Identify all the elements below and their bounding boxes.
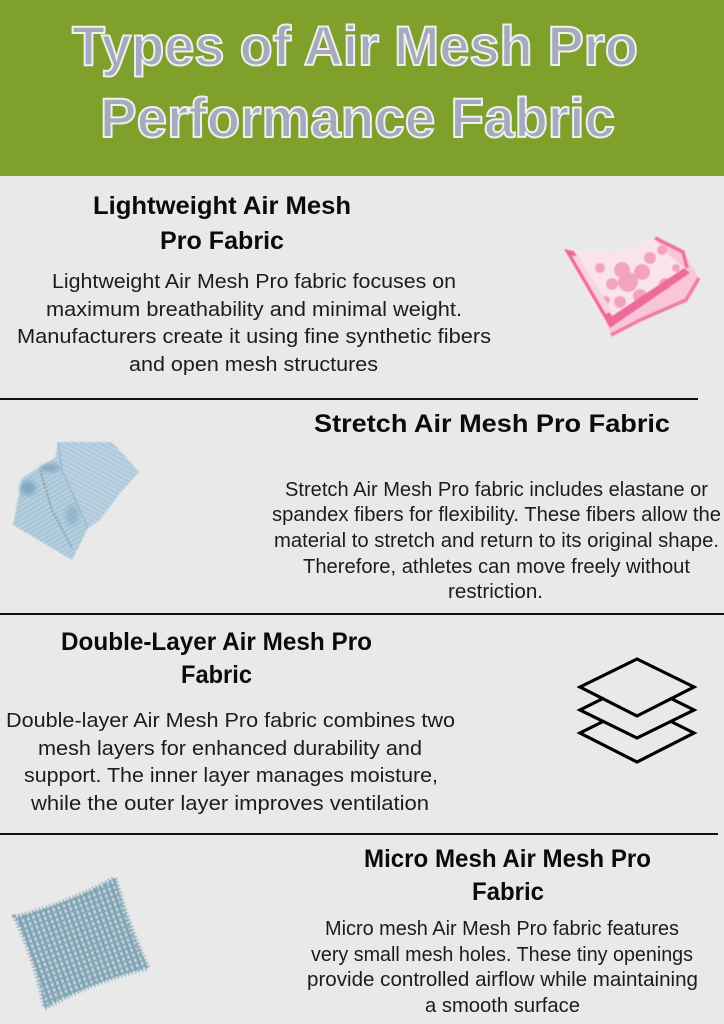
divider 1 bbox=[0, 398, 698, 400]
panel: double-layer fabric bbox=[6, 628, 694, 815]
panel: lightweight fabric bbox=[17, 192, 699, 376]
text: lightweight description: maximum breathability and minimal weight. bbox=[46, 299, 462, 321]
heading: stretch: Stretch Air Mesh Pro Fabric bbox=[314, 410, 670, 438]
text: double-layer description: Double-layer Air Mesh Pro fabric combines two bbox=[6, 710, 455, 732]
heading: micro mesh: Micro Mesh Air Mesh Pro bbox=[364, 845, 651, 873]
text: double-layer description: support. The inner layer manages moisture, bbox=[24, 765, 438, 787]
text: lightweight description: Lightweight Air Mesh Pro fabric focuses on bbox=[52, 271, 456, 293]
text: stretch description: Therefore, athletes can move freely without bbox=[303, 556, 690, 578]
title: Types of Air Mesh Pro bbox=[72, 14, 638, 77]
icon: stacked layers bbox=[580, 659, 694, 762]
text: stretch description: spandex fibers for flexibility. These fibers allow the bbox=[272, 504, 721, 526]
text: lightweight description bbox=[17, 271, 491, 376]
icon: pink patterned scarf bbox=[564, 237, 699, 337]
heading: lightweight: Lightweight Air Mesh bbox=[93, 192, 351, 220]
text: stretch description bbox=[272, 479, 721, 603]
text: stretch description: Stretch Air Mesh Pro fabric includes elastane or bbox=[285, 479, 708, 501]
title: Performance Fabric bbox=[100, 86, 615, 149]
text: double-layer description bbox=[6, 710, 455, 815]
heading: micro mesh: Fabric bbox=[472, 878, 544, 906]
heading: lightweight bbox=[93, 192, 351, 255]
header band bbox=[0, 0, 724, 176]
icon: woven mesh swatch bbox=[15, 878, 148, 1008]
divider 2 bbox=[0, 613, 724, 615]
text: micro mesh description: provide controlled airflow while maintaining bbox=[307, 969, 698, 991]
text: lightweight description: Manufacturers create it using fine synthetic fibers bbox=[17, 326, 491, 348]
heading: double-layer: Fabric bbox=[181, 661, 252, 689]
panel: stretch fabric bbox=[13, 410, 721, 603]
heading: double-layer: Double-Layer Air Mesh Pro bbox=[61, 628, 372, 656]
divider 3 bbox=[0, 833, 718, 835]
text: micro mesh description: a smooth surface bbox=[425, 995, 580, 1017]
text: double-layer description: while the outer layer improves ventilation bbox=[30, 793, 429, 815]
icon: denim swatch bbox=[13, 442, 139, 560]
text: micro mesh description bbox=[307, 918, 698, 1017]
title bbox=[72, 14, 638, 149]
text: double-layer description: mesh layers for enhanced durability and bbox=[38, 738, 422, 760]
heading: micro mesh bbox=[364, 845, 651, 906]
text: micro mesh description: very small mesh holes. These tiny openings bbox=[311, 944, 693, 966]
text: lightweight description: and open mesh structures bbox=[129, 354, 378, 376]
text: micro mesh description: Micro mesh Air Mesh Pro fabric features bbox=[325, 918, 679, 940]
text: stretch description: material to stretch and return to its original shape. bbox=[274, 530, 719, 552]
panel: micro mesh fabric bbox=[15, 845, 698, 1017]
heading: double-layer bbox=[61, 628, 372, 689]
text: stretch description: restriction. bbox=[448, 581, 543, 603]
heading: lightweight: Pro Fabric bbox=[160, 227, 284, 255]
